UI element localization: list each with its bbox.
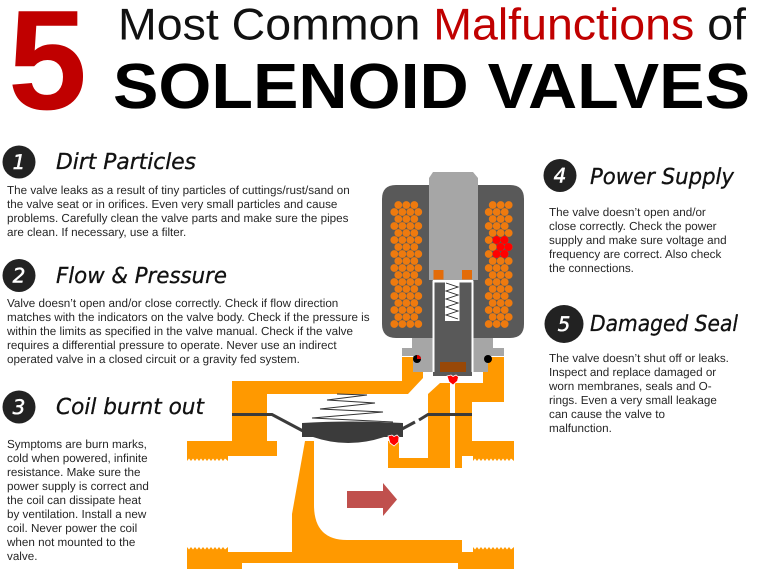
section 5: damaged seal [544, 305, 738, 435]
section 4: power supply: Power Supply [590, 165, 735, 190]
section 2: flow and pressure: Flow & Pressure [56, 264, 227, 289]
section 1: dirt particles: the valve seat or in orifices. Even very small particles and cause [7, 198, 337, 211]
brown seal [440, 362, 466, 373]
section 3: coil burnt out: resistance. Make sure the [7, 466, 140, 479]
solenoid valve diagram [187, 172, 524, 569]
section 2: flow and pressure [2, 259, 370, 366]
section 3: coil burnt out: coil. Never power the coil [7, 522, 137, 535]
section 2: flow and pressure: matches with the indicators on the valve body. Check if the pressure is [7, 311, 370, 324]
plunger spring [445, 281, 460, 321]
section 5: damaged seal: Damaged Seal [590, 312, 738, 337]
section 5: damaged seal: 5 [558, 312, 570, 336]
fixed core [429, 172, 478, 280]
section 2: flow and pressure: 2 [13, 264, 25, 288]
diaphragm [232, 414, 472, 431]
main valve spring [312, 394, 393, 422]
section 4: power supply: The valve doesn’t open and/or [549, 206, 706, 219]
section 2: flow and pressure: Valve doesn’t open and/or close correctly. Check if flow direction [7, 297, 338, 310]
title line 2: SOLENOID VALVES [113, 50, 750, 122]
section 1: dirt particles: 1 [13, 150, 25, 174]
section 1: dirt particles [2, 146, 350, 239]
section 3: coil burnt out: Symptoms are burn marks, [7, 438, 147, 451]
o-rings [413, 355, 492, 363]
section 4: power supply: close correctly. Check the power [549, 220, 717, 233]
section 3: coil burnt out: 3 [13, 395, 25, 419]
section 4: power supply: supply and make sure voltage and [549, 234, 727, 247]
section 3: coil burnt out: the coil can dissipate heat [7, 494, 142, 507]
copper windings, right [489, 205, 509, 324]
solenoid coil housing [382, 185, 524, 338]
damaged seal mark, pilot [447, 375, 458, 385]
section 1: dirt particles: are clean. If necessary, use a filter. [7, 226, 186, 239]
section 4: power supply: 4 [554, 164, 566, 188]
lower grey valve bonnet [402, 338, 504, 372]
section 2: flow and pressure: requires a differential pressure to operate. Never use an indirect [7, 339, 337, 352]
copper windings, left [394, 205, 419, 324]
flow direction arrow [347, 483, 397, 516]
section 4: power supply: frequency are correct. Also check [549, 248, 722, 261]
section 2: flow and pressure: within the limits as specified in the valve manual. Check if the valve [6, 325, 353, 338]
section 1: dirt particles: Dirt Particles [56, 150, 196, 175]
valve body: orange castings [187, 357, 514, 569]
damaged seal mark, disc [388, 435, 399, 446]
section 4: power supply [544, 159, 735, 275]
title line 1: Most Common Malfunctions of [118, 0, 747, 50]
section 5: damaged seal: The valve doesn’t shut off or leaks. [549, 352, 729, 365]
section 3: coil burnt out: Coil burnt out [56, 395, 205, 420]
section 5: damaged seal: can cause the valve to [549, 408, 665, 421]
section 3: coil burnt out: when not mounted to the [6, 536, 135, 549]
section 3: coil burnt out [2, 390, 205, 563]
section 3: coil burnt out: valve. [7, 550, 37, 563]
section 3: coil burnt out: cold when powered, infinite [7, 452, 148, 465]
section 4: power supply: the connections. [549, 262, 634, 275]
section 1: dirt particles: problems. Carefully clean the valve parts and make sure the pipes [7, 212, 349, 225]
section 3: coil burnt out: by ventilation. Install a new [7, 508, 147, 521]
section 1: dirt particles: The valve leaks as a result of tiny particles of cuttings/rust/sand on [7, 184, 350, 197]
section 5: damaged seal: malfunction. [549, 422, 612, 435]
section 5: damaged seal: rings. Even a very small leakage [549, 394, 717, 407]
plunger tube and plunger [434, 282, 472, 376]
section 5: damaged seal: Inspect and replace damaged or [549, 366, 716, 379]
plunger base [433, 372, 472, 376]
main valve disc [302, 422, 403, 443]
section 2: flow and pressure: operated valve in a closed circuit or a gravity fed system. [7, 353, 300, 366]
section 3: coil burnt out: power supply is correct and [7, 480, 149, 493]
section 5: damaged seal: worn membranes, seals and O- [548, 380, 712, 393]
orange core shading rings [434, 270, 472, 280]
burnt coil spot [492, 236, 512, 258]
